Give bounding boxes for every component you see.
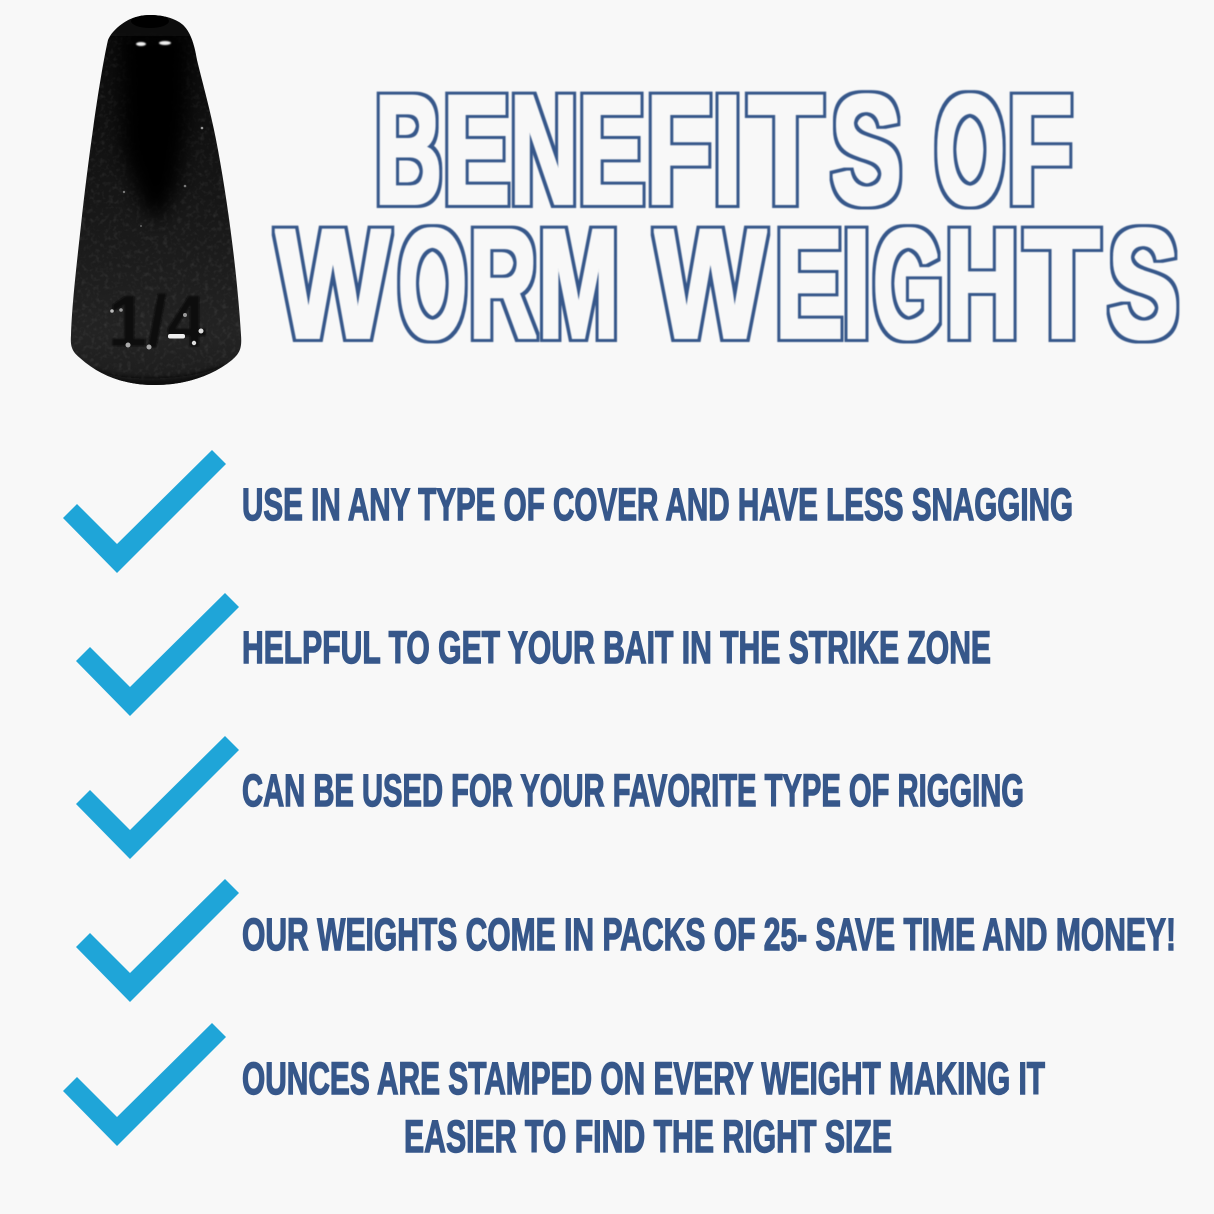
icon: check mark 3 bbox=[76, 736, 239, 859]
title: I bbox=[842, 198, 871, 372]
title: E bbox=[775, 198, 843, 372]
title: T bbox=[748, 64, 823, 238]
title: O bbox=[398, 198, 467, 372]
icon: weight top hole bbox=[131, 14, 169, 28]
title: F bbox=[1007, 64, 1073, 238]
title bbox=[276, 64, 1179, 372]
title: W bbox=[655, 198, 767, 372]
benefit 5 text bbox=[242, 1053, 1045, 1162]
title: E bbox=[443, 64, 510, 238]
title: W bbox=[276, 198, 391, 372]
icon: check mark 1 bbox=[63, 450, 226, 573]
title: T bbox=[1024, 198, 1100, 372]
title: B bbox=[375, 64, 442, 238]
title: I bbox=[713, 64, 742, 238]
title: M bbox=[538, 198, 619, 372]
title: G bbox=[873, 198, 943, 372]
icon: check mark 2 bbox=[76, 593, 239, 716]
benefit 5 text: EASIER TO FIND THE RIGHT SIZE bbox=[404, 1111, 892, 1162]
weight stamp: 1/4 bbox=[108, 282, 206, 362]
title: N bbox=[510, 64, 578, 238]
icon: black worm weight with 1/4 stamp bbox=[70, 15, 242, 385]
icon: check mark 5 bbox=[63, 1023, 226, 1146]
title: R bbox=[469, 198, 537, 372]
title: H bbox=[945, 198, 1019, 372]
title: S bbox=[1108, 198, 1179, 372]
title: S bbox=[831, 64, 902, 238]
icon: check mark 4 bbox=[76, 879, 239, 1002]
title: E bbox=[578, 64, 645, 238]
title: O bbox=[935, 64, 1005, 238]
title: F bbox=[646, 64, 712, 238]
